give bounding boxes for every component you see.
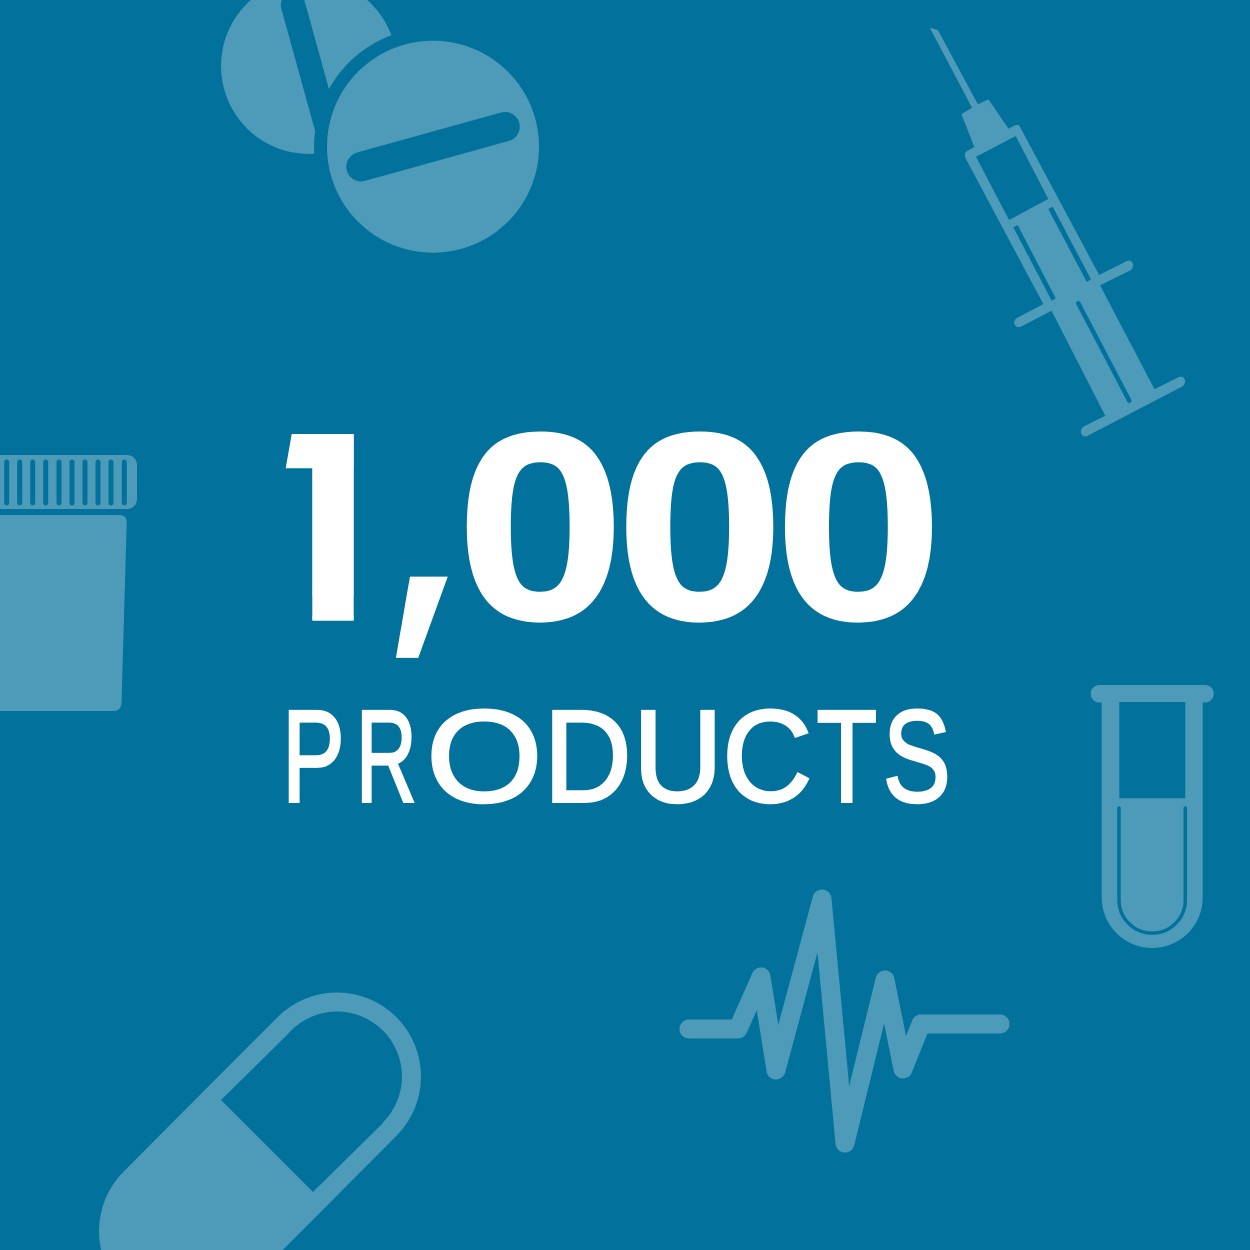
jar lid <box>0 455 137 509</box>
label: PRODUCTS: D <box>544 682 632 830</box>
jar body <box>0 515 127 711</box>
icon: capsule <box>183 1012 402 1231</box>
icon: specimen jar <box>0 455 137 711</box>
label: PRODUCTS: S <box>883 682 951 830</box>
icon: pulse line <box>689 899 1000 1143</box>
label: PRODUCTS: R <box>356 682 417 830</box>
number: 1,000: 1 <box>241 377 410 676</box>
label: PRODUCTS: O <box>426 682 543 830</box>
label: PRODUCTS: T <box>816 682 877 830</box>
label: PRODUCTS: U <box>633 682 723 830</box>
label: PRODUCTS: C <box>722 682 812 830</box>
number: 1,000: , <box>376 392 485 683</box>
icon: tablets <box>221 0 552 266</box>
icon: syringe <box>931 28 1185 436</box>
number: 1,000 <box>286 432 932 658</box>
number: 1,000: 000 <box>456 377 943 676</box>
icon: test tube <box>1091 685 1214 948</box>
label: PRODUCTS: P <box>282 682 345 830</box>
